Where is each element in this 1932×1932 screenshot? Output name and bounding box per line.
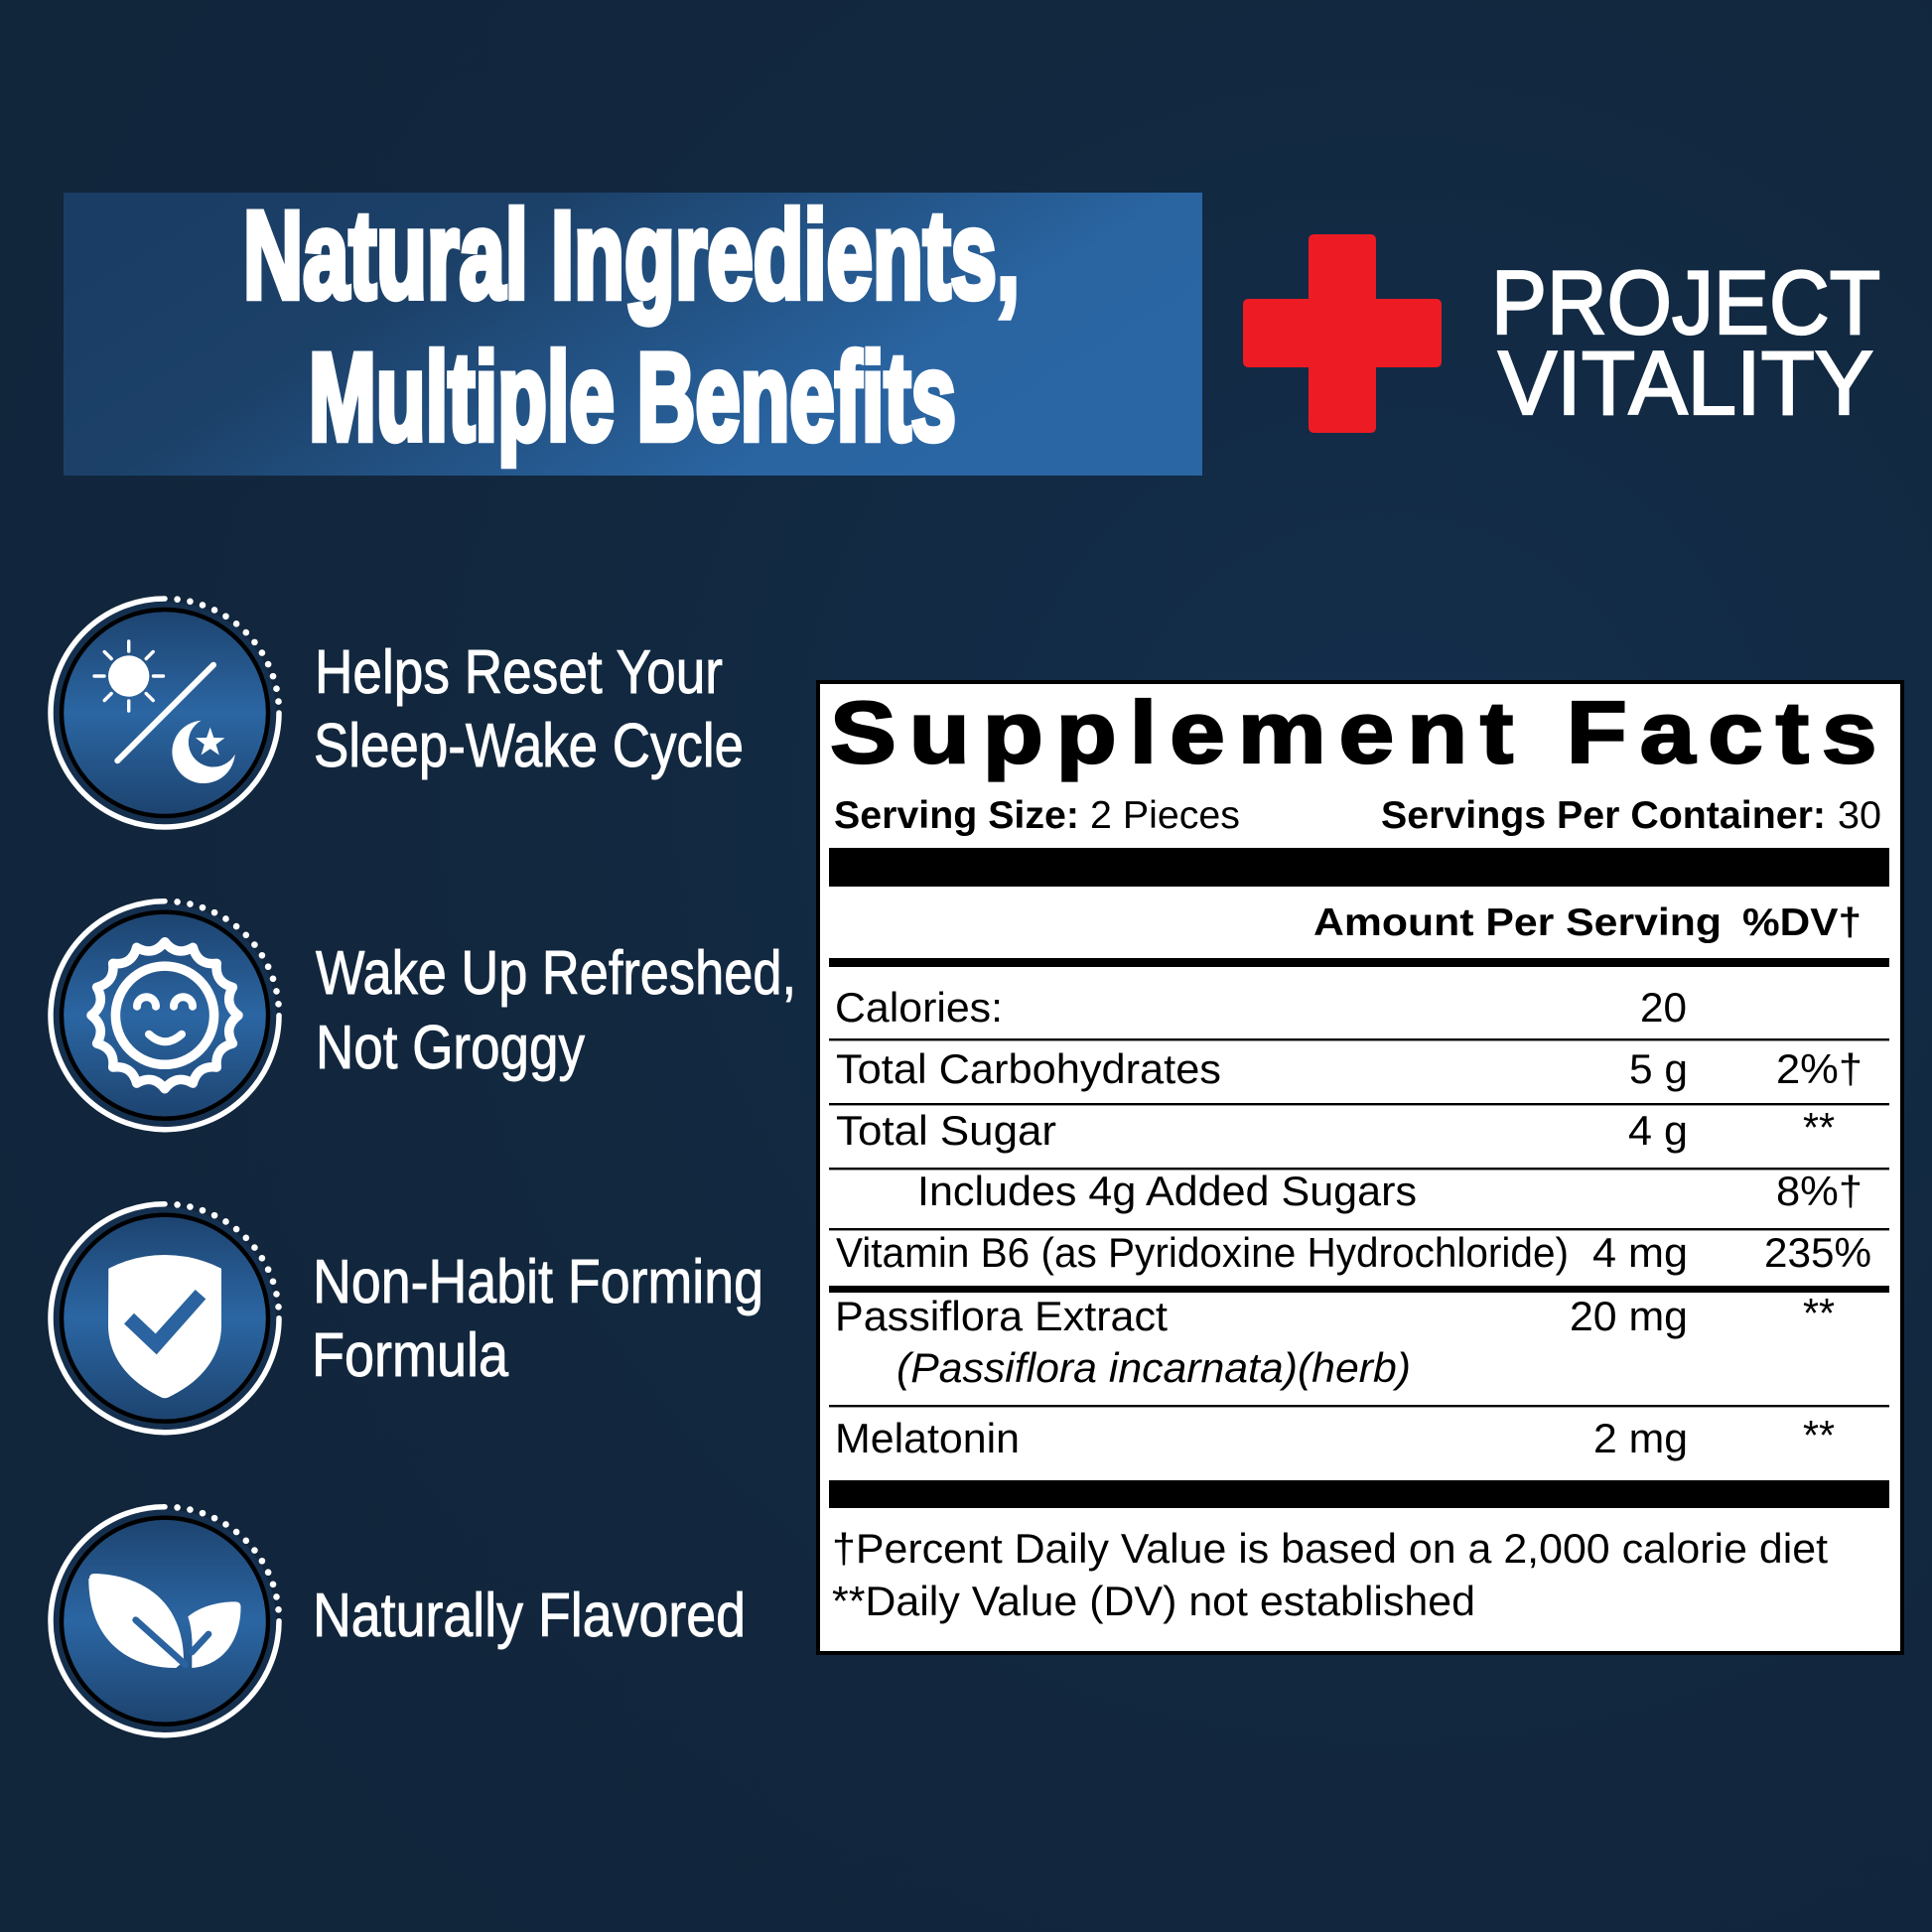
serving size	[834, 794, 1240, 837]
serving size: Serving Size:	[834, 794, 1079, 837]
row: vitamin b6: Vitamin B6 (as Pyridoxine Hydrochloride)	[836, 1229, 1569, 1276]
serving size: 2 Pieces	[1090, 794, 1240, 837]
row: added sugars	[917, 1168, 1863, 1214]
row: total sugar: **	[1803, 1104, 1835, 1151]
row: total sugar	[836, 1104, 1835, 1154]
icon: shield check badge	[51, 1204, 279, 1433]
row: total carbohydrates: 5 g	[1629, 1045, 1688, 1092]
row: total carbohydrates: 2%†	[1776, 1045, 1863, 1092]
benefit 3 text: Non-Habit Forming	[313, 1248, 763, 1316]
brand logo	[1243, 234, 1880, 434]
brand name line 2: VITALITY	[1498, 334, 1873, 434]
footnotes: †Percent Daily Value is based on a 2,000 calorie diet	[832, 1525, 1828, 1572]
benefit 4 text: Naturally Flavored	[313, 1582, 746, 1650]
benefit 3: non-habit forming	[51, 1204, 763, 1433]
footnotes: **Daily Value (DV) not established	[832, 1578, 1475, 1624]
column headings: %DV†	[1742, 901, 1862, 944]
row: calories: Calories:	[835, 984, 1003, 1031]
row: added sugars: 8%†	[1776, 1168, 1863, 1214]
row: melatonin: **	[1803, 1412, 1835, 1458]
row: melatonin: 2 mg	[1593, 1415, 1688, 1461]
icon: sun and moon badge	[51, 599, 279, 827]
row: passiflora extract	[835, 1290, 1835, 1391]
benefit 2 text: Not Groggy	[316, 1014, 585, 1082]
row: total sugar: 4 g	[1628, 1107, 1688, 1154]
icon: smiling sun badge	[51, 901, 279, 1130]
footnotes	[832, 1525, 1828, 1624]
row: total carbohydrates	[836, 1045, 1863, 1092]
benefit 3 text	[312, 1248, 763, 1390]
icon: red cross	[1243, 234, 1442, 433]
benefit 1 text	[314, 638, 744, 780]
benefit 2: wake up refreshed	[51, 901, 796, 1130]
benefit 2 text	[316, 939, 796, 1082]
column headings: Amount Per Serving	[1313, 901, 1722, 944]
brand name line 1: PROJECT	[1491, 253, 1880, 353]
row: vitamin b6: 4 mg	[1592, 1229, 1688, 1276]
supplement facts heading: Supplement Facts	[830, 684, 1876, 781]
benefit 1 text: Sleep-Wake Cycle	[314, 712, 744, 780]
row: passiflora extract: **	[1803, 1290, 1835, 1336]
row: melatonin: Melatonin	[835, 1415, 1020, 1461]
row: vitamin b6: 235%	[1764, 1229, 1871, 1276]
row: calories	[835, 984, 1687, 1031]
row: melatonin	[835, 1412, 1835, 1461]
benefit 1 text: Helps Reset Your	[315, 638, 723, 707]
row: total carbohydrates: Total Carbohydrates	[836, 1045, 1221, 1092]
column headings	[1313, 901, 1862, 944]
panel: supplement facts	[818, 682, 1902, 1653]
row: passiflora extract: (Passiflora incarnata)(herb)	[897, 1344, 1411, 1391]
icon: leaves badge	[51, 1507, 279, 1735]
row: total sugar: Total Sugar	[836, 1107, 1056, 1154]
servings per container: Servings Per Container:	[1381, 794, 1826, 837]
row: passiflora extract: Passiflora Extract	[835, 1293, 1168, 1339]
benefit 2 text: Wake Up Refreshed,	[316, 939, 796, 1008]
title line 2: Multiple Benefits	[309, 329, 956, 467]
benefit 3 text: Formula	[312, 1321, 508, 1390]
row: calories: 20	[1640, 984, 1687, 1031]
benefit 4: naturally flavored	[51, 1507, 746, 1735]
benefit 1: sleep-wake cycle	[51, 599, 744, 827]
title banner	[64, 187, 1202, 476]
servings per container: 30	[1838, 794, 1881, 837]
title line 1: Natural Ingredients,	[243, 187, 1020, 325]
row: added sugars: Includes 4g Added Sugars	[917, 1168, 1417, 1214]
row: passiflora extract: 20 mg	[1570, 1293, 1688, 1339]
